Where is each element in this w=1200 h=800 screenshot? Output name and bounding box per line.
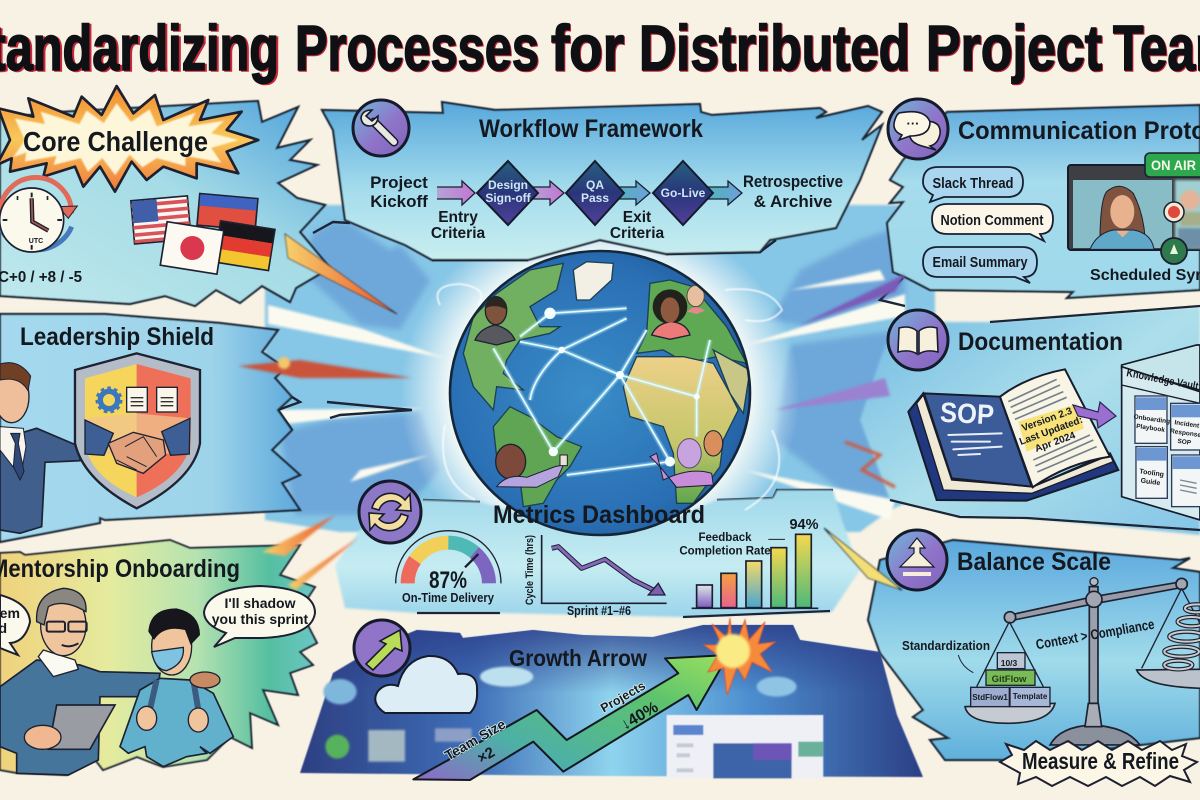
value: 94 percent: 94% (789, 517, 819, 533)
vault card: onboarding playbook: Onboarding (1133, 414, 1170, 426)
cream rays around the globe (268, 270, 905, 520)
cloud (375, 656, 477, 713)
communication background (887, 105, 1200, 298)
blurred data-centre backdrop (323, 667, 797, 762)
growth background (300, 625, 923, 777)
clock small label: UTC (29, 238, 43, 245)
shield with handshake (75, 353, 200, 508)
speech bubble: mentor (0, 595, 30, 655)
team members on the globe (475, 285, 723, 487)
diamond: design sign-off: Sign-off (485, 191, 532, 205)
streak: middle right (775, 378, 890, 410)
label: feedback completion rate: Completion Rate (679, 546, 771, 558)
heading: balance scale: Balance Scale (957, 548, 1111, 576)
icon: open book (888, 310, 948, 370)
top edge (990, 306, 1200, 322)
heading: workflow framework: Workflow Framework (479, 115, 703, 143)
icon: balance arrow (887, 530, 947, 590)
title: Processes (295, 12, 539, 84)
microphone button (1161, 238, 1187, 264)
bottom edge (890, 500, 1200, 530)
label: team size: Team Size (442, 716, 508, 763)
person: man top left (475, 297, 515, 345)
panel: communication protocol (887, 99, 1200, 298)
on air badge (1145, 153, 1200, 177)
bubble: slack thread (923, 167, 1023, 202)
title: Processes (296, 13, 540, 85)
central sky panel (265, 205, 935, 532)
blurred browser window (667, 715, 823, 778)
flag: USA (131, 196, 191, 244)
step: retrospective and archive: Retrospective (743, 172, 843, 191)
person: behind right (704, 431, 723, 456)
person: seated with phone (496, 444, 567, 487)
continents (463, 262, 750, 507)
balance background (868, 540, 1200, 760)
mentorship background (0, 540, 317, 775)
title: for (552, 13, 625, 85)
flag: blue and red (197, 194, 258, 230)
arrow: QA to go-live (616, 181, 650, 205)
darker sky facets (280, 222, 905, 515)
value: 87 percent: 87% (429, 567, 467, 594)
ocean (450, 251, 750, 535)
balance scale drawing (958, 578, 1200, 745)
bubble: notion comment: Notion Comment (940, 213, 1044, 229)
streak: middle left core (278, 357, 290, 369)
person: woman top right (652, 289, 690, 339)
panel: workflow framework (322, 100, 882, 260)
diamond: QA pass: QA (586, 178, 604, 192)
panel: metrics dashboard content (359, 481, 819, 618)
metrics bottom edges (417, 611, 830, 617)
label: entry criteria: Entry (438, 209, 478, 226)
note: version info: Version 2.3 (1020, 406, 1074, 434)
student figure (120, 608, 233, 767)
label: entry criteria: Criteria (431, 225, 486, 242)
diamond: design sign-off: Design (488, 178, 528, 192)
note: version info: Last Updated: (1018, 415, 1084, 448)
record button (1164, 202, 1184, 222)
arrow: growth trend (413, 655, 728, 780)
workflow background (322, 102, 882, 260)
streak: lower left two (288, 538, 358, 590)
heading: leadership shield: Leadership Shield (20, 323, 214, 351)
core challenge background (0, 101, 330, 306)
jagged outline strokes around the centre (278, 222, 905, 502)
panel: core challenge (0, 86, 330, 306)
label: down 40 percent: ↓40% (618, 699, 661, 734)
leadership background (0, 314, 300, 542)
label: SOP: SOP (939, 397, 995, 430)
icon: growth (354, 620, 410, 676)
streak: middle left (238, 360, 412, 378)
label: exit criteria: Criteria (610, 225, 665, 242)
bubble: email summary (923, 247, 1037, 283)
mentor figure (0, 588, 160, 775)
vault card: tooling guide: Tooling (1139, 468, 1164, 479)
globe outline (450, 251, 750, 535)
panel: leadership shield (0, 314, 300, 542)
label: times two: ×2 (475, 744, 498, 767)
video call window (1068, 165, 1200, 264)
video participant: woman (1090, 186, 1154, 249)
panel: documentation (860, 306, 1200, 535)
icon: chat bubbles (888, 99, 948, 159)
vault card: incident response: Incident (1174, 419, 1200, 430)
heading: documentation: Documentation (958, 328, 1123, 356)
glowing orbits (438, 284, 782, 510)
step: project kickoff: Project (370, 173, 428, 192)
box label: template: Template (1013, 692, 1048, 701)
bubble: email summary: Email Summary (932, 255, 1028, 271)
speech bubble: student: I'll shadow (224, 595, 296, 611)
speech bubble: student (204, 586, 315, 647)
bubble: slack thread: Slack Thread (932, 176, 1014, 192)
axis label: sprints: Sprint #1–#6 (567, 604, 631, 618)
network lines (493, 308, 710, 475)
vault card: incident response: SOP (1177, 438, 1192, 447)
icon: clock with timezone ring (0, 177, 77, 252)
person: waving in purple (650, 439, 713, 487)
label: projects: Projects (598, 679, 648, 715)
icon: wrench (353, 100, 409, 156)
video participant: blurred (1178, 190, 1200, 248)
icon: chat bubbles: ··· (906, 116, 920, 131)
arrow: go-live to retrospective (708, 181, 742, 205)
flag: Germany (214, 221, 275, 271)
title (0, 12, 1200, 85)
diamond: go-live: Go-Live (661, 186, 706, 200)
explosion core (716, 634, 750, 668)
knowledge vault (1122, 345, 1200, 520)
arrow: kickoff to design (437, 181, 475, 205)
streak: upper right (800, 274, 905, 325)
metrics background (335, 490, 860, 617)
label: exit criteria: Exit (623, 209, 651, 226)
label: context over compliance: Context > Compliance (1035, 616, 1156, 652)
dark upper band (300, 625, 923, 777)
panel: metrics dashboard (335, 490, 860, 617)
step: project kickoff: Kickoff (370, 192, 428, 211)
measure and refine burst (1000, 741, 1197, 786)
bar chart: feedback completion (692, 534, 818, 608)
starburst heading shape (0, 86, 258, 192)
person: small top right (687, 285, 705, 314)
title: Project (927, 13, 1103, 85)
globe glow (400, 208, 800, 578)
title: Distributed (639, 12, 910, 84)
panel: mentorship onboarding (0, 540, 317, 775)
title: Distributed (640, 13, 911, 85)
speech bubble: student: you this sprint (212, 611, 309, 627)
book: SOP (908, 369, 1118, 501)
note: version info: Apr 2024 (1034, 430, 1077, 455)
documentation background (860, 307, 1200, 535)
gauge: on-time delivery (396, 531, 501, 583)
box label: gitflow: GitFlow (992, 674, 1027, 685)
label: on-time delivery: On-Time Delivery (402, 591, 494, 605)
diamond: QA pass (566, 161, 624, 225)
panel: balance scale (868, 530, 1200, 786)
vault card: tooling guide: Guide (1140, 478, 1161, 487)
heading: growth arrow: Growth Arrow (509, 645, 647, 671)
flags (131, 194, 275, 274)
explosion at arrow tip (704, 618, 775, 695)
streak: red spark (845, 442, 895, 487)
axis label: cycle time: Cycle Time (hrs) (524, 535, 536, 605)
box label: stdflow: StdFlow1 (972, 693, 1008, 702)
heading: core challenge: Core Challenge (23, 126, 208, 157)
streak: lower left one (262, 515, 335, 556)
title: for (551, 12, 624, 84)
heading: metrics dashboard: Metrics Dashboard (493, 501, 705, 529)
vault card: onboarding playbook: Playbook (1136, 423, 1166, 434)
arrow: book to vault (1073, 402, 1116, 428)
streak: lower right (824, 528, 902, 590)
bubble: notion comment (932, 204, 1053, 241)
streak: upper left (285, 234, 397, 314)
man in suit (0, 363, 80, 533)
line chart: cycle time (542, 535, 667, 603)
flag: Japan (160, 222, 224, 274)
label: standardization: Standardization (902, 638, 990, 653)
diamond: design sign-off (477, 161, 538, 225)
box label: top: 10/3 (1001, 658, 1018, 668)
panel: growth arrow (300, 618, 923, 780)
arrow: design to QA (530, 181, 564, 205)
label: feedback completion rate: Feedback (698, 532, 752, 544)
diamond: QA pass: Pass (581, 191, 609, 205)
central globe (438, 251, 782, 535)
on air badge: ON AIR (1151, 158, 1196, 173)
title: Project (926, 12, 1102, 84)
icon: refresh cycle (359, 481, 421, 543)
step: retrospective second line: & Archive (754, 192, 832, 211)
diamond: go-live (653, 161, 713, 225)
energy streaks (238, 234, 905, 590)
